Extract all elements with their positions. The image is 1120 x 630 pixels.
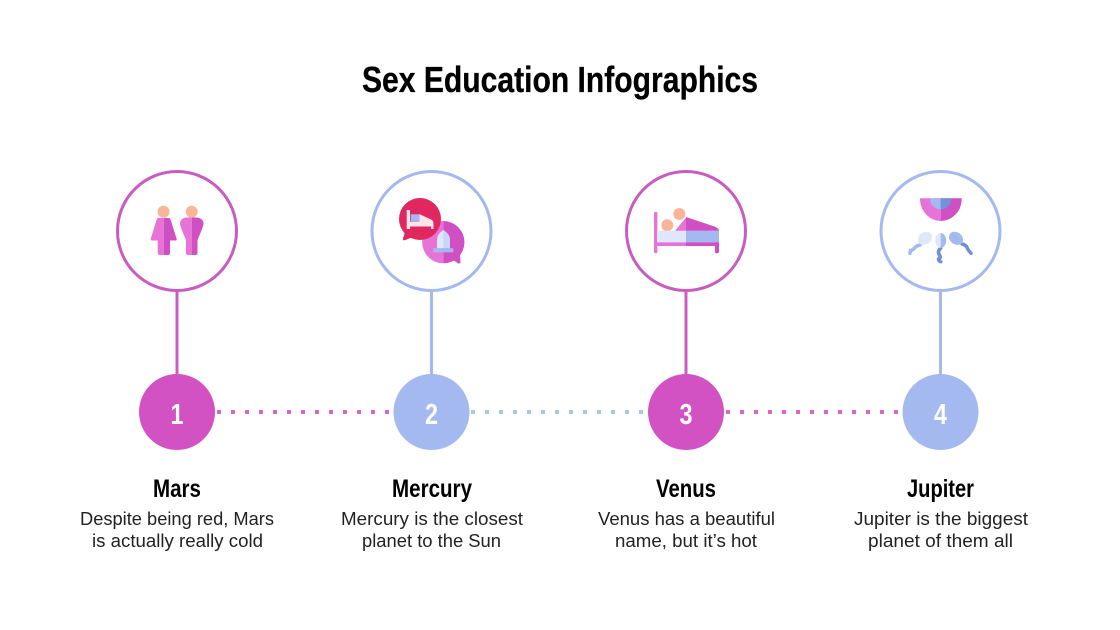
number 1: 1 [170,399,184,431]
description: Mercury: Mercury is the closest [341,509,523,529]
description: Venus: name, but it’s hot [615,531,757,551]
heading: Venus: Venus [656,475,716,503]
number 2: 2 [425,399,438,431]
icon: man and woman figures [151,206,204,255]
icon ring: Mars [118,172,236,290]
number 4: 4 [934,399,947,431]
description: Venus: Venus has a beautiful [598,509,775,529]
stem: Mars [176,290,178,376]
panel: Venus [598,172,775,551]
icon ring: Jupiter [881,172,1000,290]
icon: egg and sperm cells [910,198,971,262]
number 3: 3 [680,399,692,431]
heading: Mercury: Mercury [392,475,472,503]
stem: Venus [684,290,688,376]
dotted connector 1 to 2 [217,410,392,414]
dotted connector 2 to 3 [471,410,646,414]
number badge 2 [394,374,470,450]
description: Mars: is actually really cold [92,531,263,551]
description: Mercury: planet to the Sun [362,531,501,551]
panel: Mercury [341,172,523,551]
number badge 3 [648,374,724,450]
heading: Jupiter: Jupiter [907,475,974,503]
heading: Mars: Mars [153,475,201,503]
description: Mercury [341,509,523,551]
icon: couple in bed [654,208,719,253]
description: Jupiter: planet of them all [868,531,1013,551]
icon ring: Venus [626,172,746,290]
stem: Jupiter [939,290,942,376]
panel: Mars [80,172,274,551]
description: Mars [80,509,274,551]
icon: speech bubbles with bed and condom [399,198,464,264]
description: Mars: Despite being red, Mars [80,509,274,529]
description: Jupiter [854,509,1028,551]
panel: Jupiter [854,172,1028,551]
description: Venus [598,509,775,551]
icon ring: Mercury [372,172,491,290]
number badge 4 [902,374,978,450]
description: Jupiter: Jupiter is the biggest [854,509,1028,529]
number badge 1 [139,374,215,450]
stem: Mercury [430,290,433,376]
dotted connector 3 to 4 [726,410,901,414]
title: Sex Education Infographics [362,59,758,100]
